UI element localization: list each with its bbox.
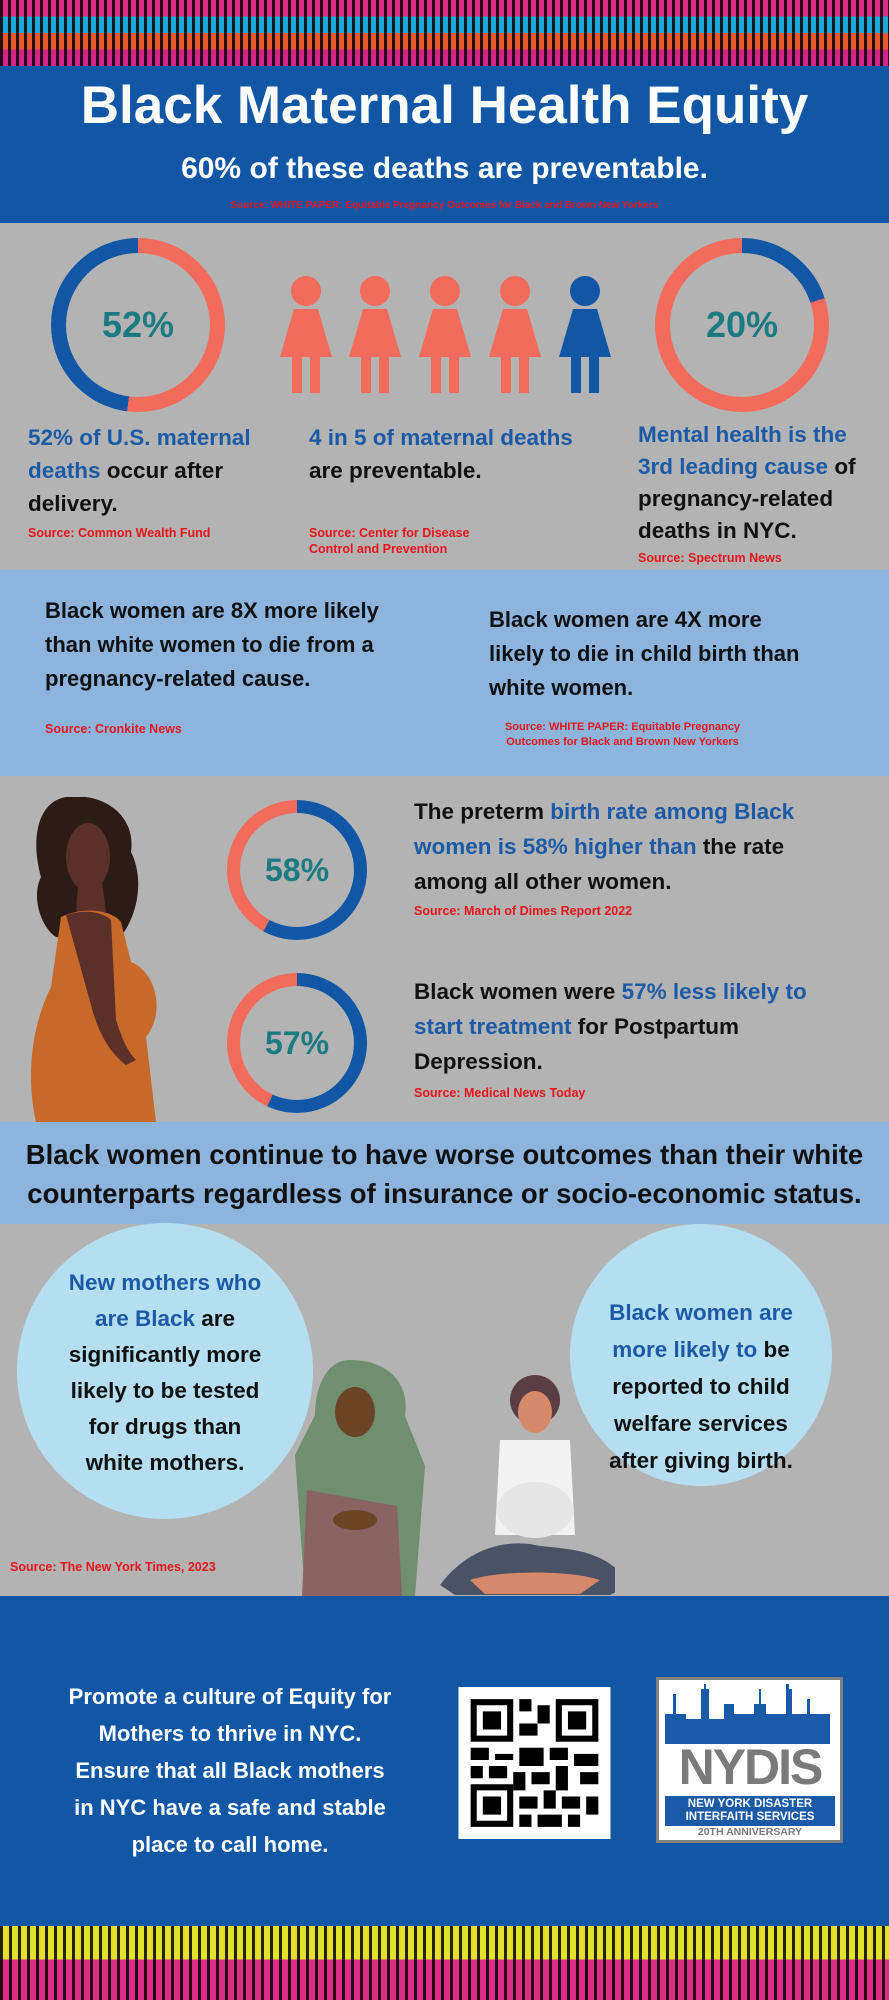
ring 52%: 52% bbox=[102, 304, 174, 345]
text: call to action: place to call home. bbox=[132, 1832, 328, 1857]
text: call to action: Promote a culture of Equity for bbox=[69, 1684, 391, 1709]
panel: testing and reporting bbox=[0, 1224, 889, 1596]
panel: preterm / postpartum bbox=[0, 776, 889, 1122]
panel: footer call to action bbox=[0, 1596, 889, 1926]
text: call to action: Mothers to thrive in NYC. bbox=[99, 1721, 361, 1746]
source: CDC bbox=[309, 526, 469, 556]
circle: child welfare bbox=[570, 1224, 832, 1486]
source: CDC: Control and Prevention bbox=[309, 542, 447, 556]
ring 20%: 20% bbox=[706, 304, 778, 345]
ring 57%: 57% bbox=[265, 1024, 329, 1060]
panel: stats row 1 bbox=[0, 223, 889, 570]
source: commonwealth: Source: Common Wealth Fund bbox=[28, 526, 210, 540]
text: call to action: Ensure that all Black mothers bbox=[75, 1758, 385, 1783]
logo: NYDIS bbox=[656, 1677, 843, 1843]
text: call to action: in NYC have a safe and stable bbox=[74, 1795, 386, 1820]
source: march of dimes: Source: March of Dimes Report 2022 bbox=[414, 904, 632, 918]
illustration: two women bbox=[295, 1360, 615, 1596]
logo: NYDIS: NYDIS bbox=[679, 1739, 821, 1795]
subtitle: 60% of these deaths are preventable. bbox=[181, 152, 708, 185]
source: Source: WHITE PAPER: Equitable Pregnancy Outcomes for Black and Brown New Yorkers bbox=[231, 200, 658, 211]
top pattern band bbox=[0, 0, 889, 66]
source: white paper: Source: WHITE PAPER: Equitable Pregnancy Outcomes for Black and Brown New Yorkers bbox=[505, 721, 740, 748]
logo: NYDIS: INTERFAITH SERVICES bbox=[686, 1811, 814, 1823]
ring 52% bbox=[51, 238, 225, 412]
text: preterm: The preterm birth rate among Black women is 58% higher than the rate among all other women. bbox=[414, 799, 794, 894]
logo: NYDIS: 20TH ANNIVERSARY bbox=[698, 1826, 802, 1838]
banner: Black women continue to have worse outcomes than their white counterparts regardless of insurance or socio-economic status. bbox=[26, 1139, 863, 1209]
circle: child welfare: Black women are more likely to be reported to child welfare services after giving birth. bbox=[609, 1300, 793, 1473]
ring 20% bbox=[655, 238, 829, 412]
header panel bbox=[0, 66, 889, 223]
text: postpartum: Black women were 57% less likely to start treatment for Postpartum Depression. bbox=[414, 979, 807, 1074]
source: medical news today: Source: Medical News Today bbox=[414, 1086, 585, 1100]
source: CDC: Source: Center for Disease bbox=[309, 526, 469, 540]
text: 4 in 5: 4 in 5 of maternal deaths are preventable. bbox=[309, 425, 573, 483]
circle: drug testing bbox=[17, 1223, 313, 1519]
text: 4X: Black women are 4X more likely to die in child birth than white women. bbox=[489, 607, 799, 700]
source: cronkite: Source: Cronkite News bbox=[45, 722, 182, 736]
ring 58%: 58% bbox=[265, 852, 329, 888]
text: mental health: Mental health is the 3rd leading cause of pregnancy-related deaths in NYC. bbox=[638, 422, 856, 543]
source: NYT: Source: The New York Times, 2023 bbox=[10, 1560, 216, 1574]
QR code bbox=[458, 1687, 610, 1839]
banner bbox=[0, 1122, 889, 1224]
illustration: pregnant woman bbox=[31, 797, 157, 1122]
text: 8X: Black women are 8X more likely than white women to die from a pregnancy-related cause. bbox=[45, 598, 379, 691]
circle: drug testing: New mothers who are Black are significantly more likely to be tested for drugs than white mothers. bbox=[69, 1270, 261, 1475]
ring 57% bbox=[227, 973, 367, 1113]
text: call to action bbox=[69, 1684, 391, 1857]
icon: five women bbox=[280, 276, 611, 393]
panel: 8X / 4X bbox=[0, 570, 889, 776]
ring 58% bbox=[227, 800, 367, 940]
bottom pattern band bbox=[0, 1926, 889, 2000]
title: Black Maternal Health Equity bbox=[81, 76, 808, 135]
text: 52%: 52% of U.S. maternal deaths occur after delivery. bbox=[28, 425, 251, 516]
source: spectrum: Source: Spectrum News bbox=[638, 551, 782, 565]
logo: NYDIS: NEW YORK DISASTER bbox=[688, 1798, 812, 1810]
